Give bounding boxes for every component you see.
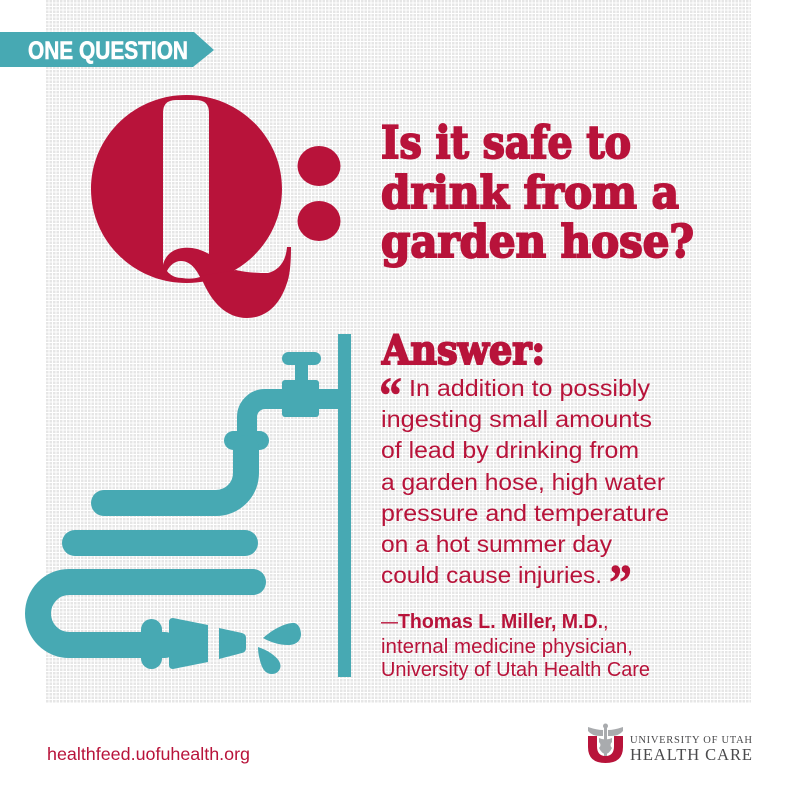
text block: attribution: —	[381, 611, 398, 633]
logo: University of Utah Health Care	[588, 724, 752, 764]
heading: question	[381, 116, 694, 268]
closing quote mark: ”	[609, 555, 632, 612]
text block: attribution: University of Utah Health Care	[381, 659, 650, 681]
nozzle collar	[141, 619, 162, 669]
banner: one question	[0, 32, 214, 67]
faucet spout	[247, 399, 339, 440]
water drop upper	[263, 623, 301, 645]
icon: faucet and garden hose	[38, 334, 351, 677]
text block: quotation: on a hot summer day	[381, 531, 612, 557]
heading: answer: Answer:	[381, 327, 545, 374]
text block: attribution	[381, 611, 650, 681]
logo mark	[588, 724, 623, 763]
logo: University of Utah Health Care: UNIVERSITY OF UTAH	[630, 735, 752, 746]
text block: quotation: pressure and temperature	[381, 500, 669, 526]
heading: question: garden hose?	[381, 215, 694, 268]
heading: question: Is it safe to	[381, 116, 631, 169]
heading: question: drink from a	[381, 166, 679, 219]
nozzle body	[169, 618, 208, 669]
website link: healthfeed.uofuhealth.org	[47, 744, 250, 764]
nozzle tip	[219, 628, 246, 659]
text block: attribution: Thomas L. Miller, M.D.	[398, 611, 603, 633]
text block: quotation: a garden hose, high water	[381, 469, 665, 495]
hose lower coil	[38, 582, 253, 645]
logo: University of Utah Health Care: HEALTH CARE	[630, 745, 752, 764]
text block: quotation: of lead by drinking from	[381, 437, 639, 463]
text block: quotation: In addition to possibly	[409, 375, 650, 401]
wall pipe	[338, 334, 351, 677]
hose middle coil	[62, 530, 258, 556]
text block: quotation: ingesting small amounts	[381, 406, 652, 432]
hose collar	[224, 431, 269, 450]
icon: large letter Q with colon	[91, 95, 340, 318]
water drop lower	[258, 647, 280, 674]
text block: quotation	[379, 368, 669, 612]
text block: quotation: could cause injuries.	[381, 562, 602, 588]
panel: dotted background	[46, 0, 751, 703]
text block: attribution: ,	[603, 611, 609, 633]
banner: one question: ONE QUESTION	[28, 37, 188, 65]
faucet handle	[282, 352, 321, 417]
hose upper coil	[104, 448, 246, 503]
opening quote mark: “	[379, 368, 402, 425]
text block: attribution: internal medicine physician,	[381, 636, 633, 658]
